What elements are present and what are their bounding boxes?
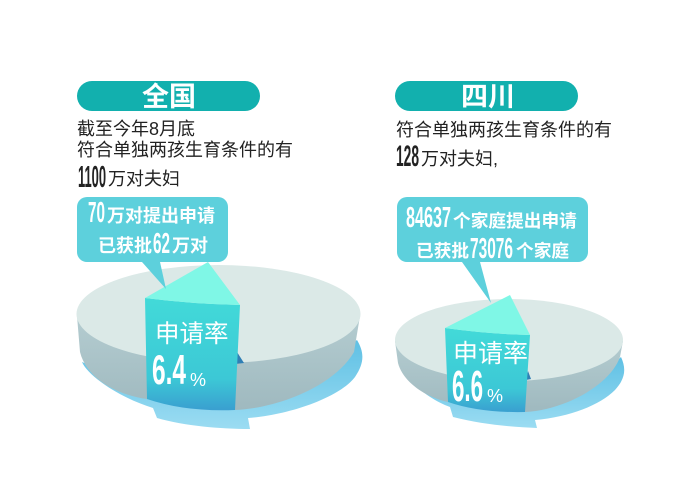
application rate: 6.4 [152,346,186,393]
blue swoosh arrow [399,357,624,428]
pie top [76,265,360,363]
national description text: 截至今年8月底 [77,119,195,139]
sichuan description text [396,120,612,173]
sichuan description text: 万对夫妇, [421,149,498,169]
pie side [395,341,623,412]
national description text [77,119,293,194]
national callout: 70 [88,197,105,229]
panel: sichuan [395,81,624,428]
national heading pill: 全国 [142,82,196,112]
national heading pill [77,81,260,112]
national description text: 符合单独两孩生育条件的有 [77,140,293,160]
national pie chart [76,262,362,429]
national callout: 万对提出申请 [107,205,215,226]
national callout [77,197,228,289]
wedge top face [445,295,530,335]
sichuan description text: 符合单独两孩生育条件的有 [396,120,612,140]
application rate: 6.6 [452,362,483,411]
sichuan callout [397,197,588,303]
wedge top face [145,262,240,305]
inner wedge shadow [235,352,244,364]
application rate [452,340,528,411]
sichuan heading pill: 四川 [461,82,515,112]
application rate [152,320,228,393]
national callout: 万对 [172,236,208,256]
national callout: 62 [153,228,170,260]
wedge front face [145,298,240,410]
application rate: 申请率 [155,320,228,348]
sichuan callout: 个家庭 [516,240,569,261]
national description text: 1100 [78,159,106,194]
application rate: 申请率 [453,340,528,368]
sichuan callout: 个家庭提出申请 [453,210,577,231]
national description text: 万对夫妇 [108,169,180,189]
panel: national [76,81,362,429]
sichuan pie chart [395,295,624,428]
sichuan heading pill [395,81,578,112]
application rate: % [487,386,503,406]
application rate: % [190,370,206,390]
sichuan description text: 128 [396,140,419,173]
sichuan callout: 已获批 [416,240,469,261]
sichuan callout: 84637 [406,202,451,234]
national callout: 已获批 [98,235,152,256]
blue swoosh arrow [82,340,362,429]
inner wedge shadow [526,371,531,380]
pie side [77,316,360,410]
pie top [395,299,623,381]
sichuan callout: 73076 [470,233,513,265]
wedge front face [445,328,530,412]
